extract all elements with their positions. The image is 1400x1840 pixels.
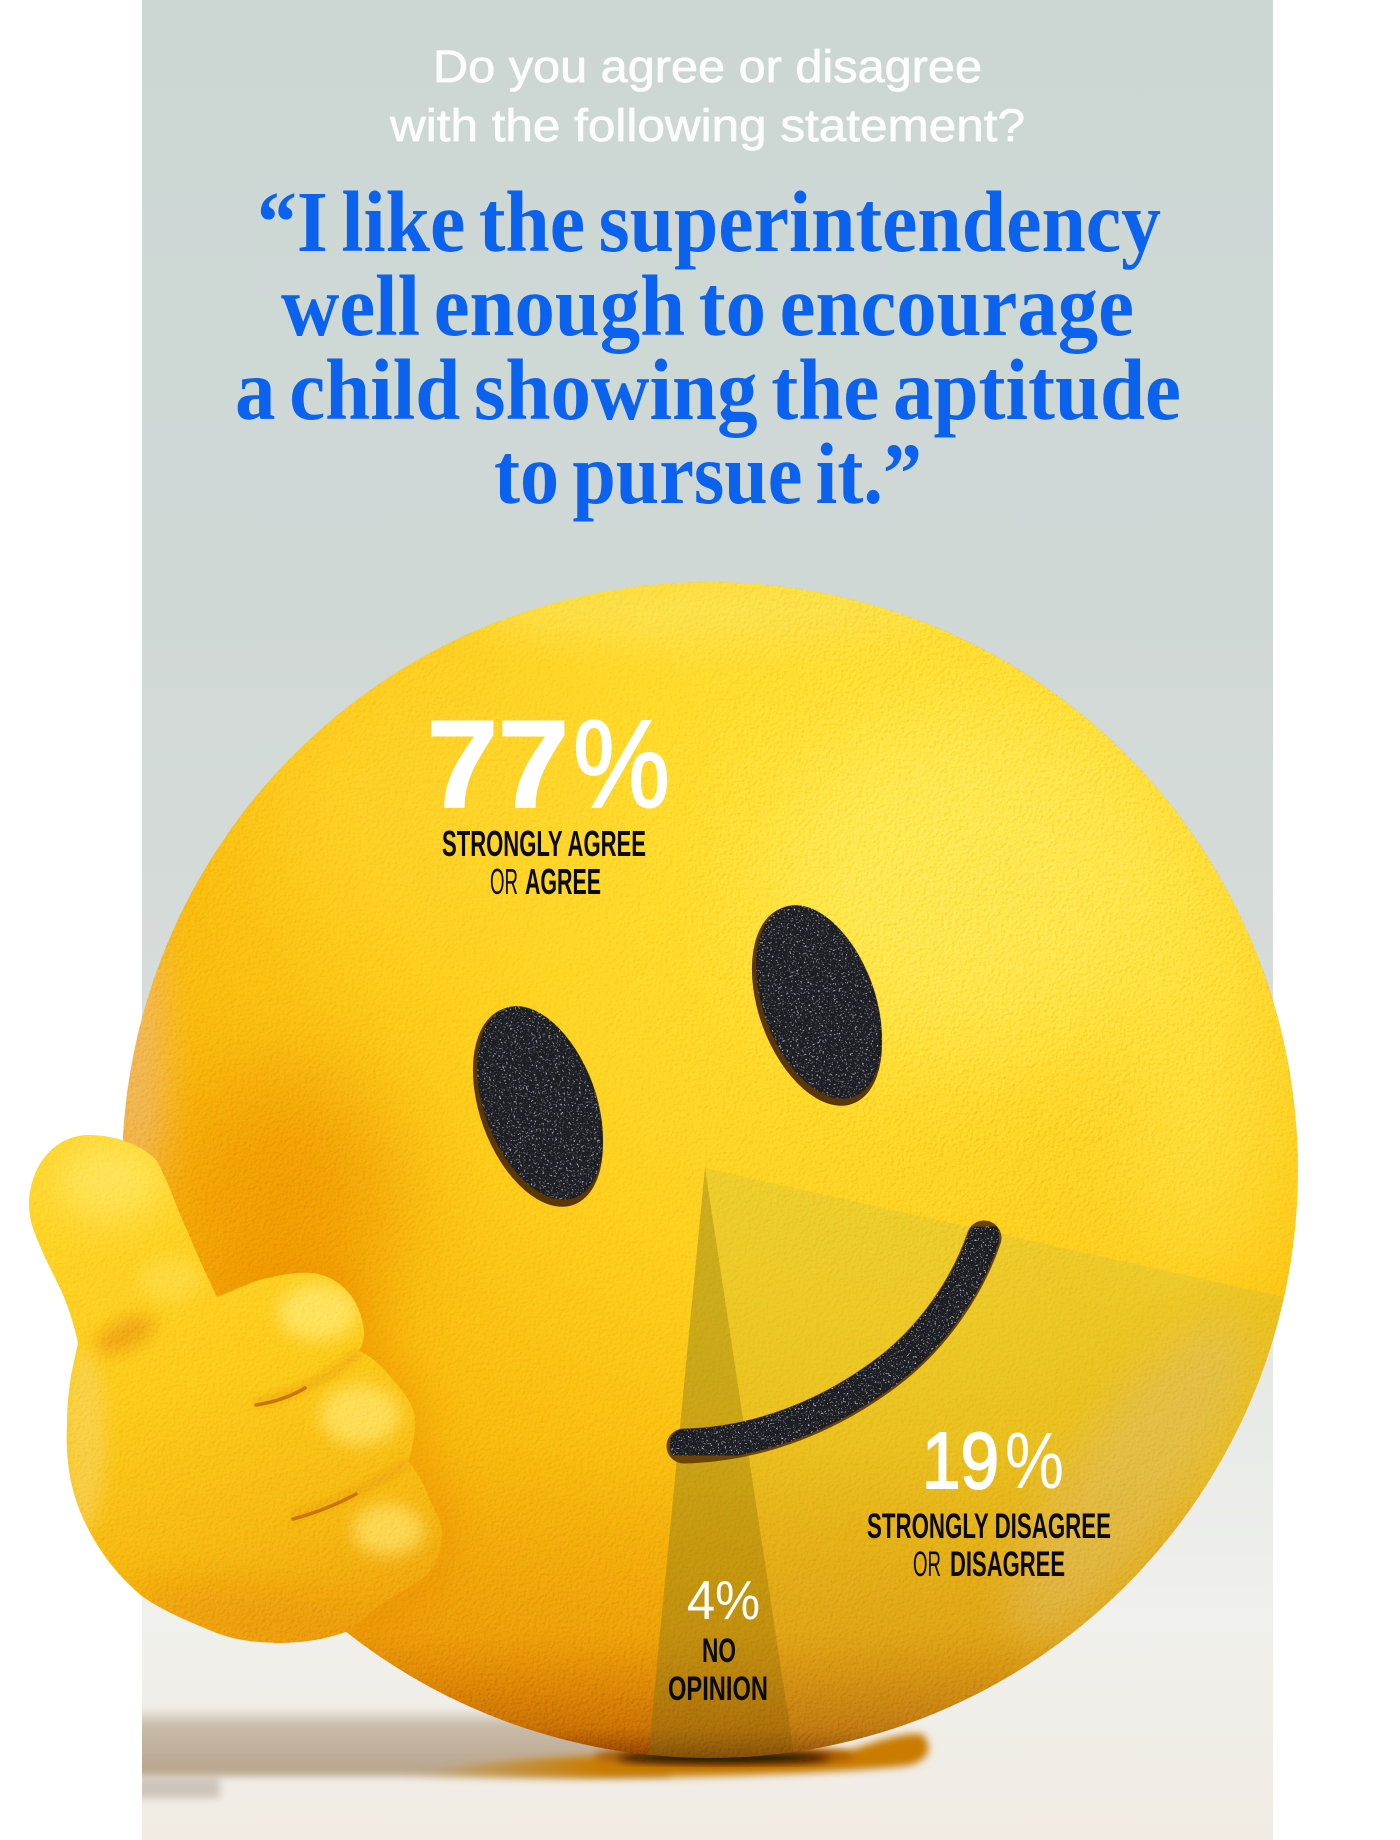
title: quoted statement: “I like the superintendency bbox=[257, 173, 1161, 270]
pie slice: 19% strongly disagree or disagree bbox=[705, 1168, 1284, 1752]
title: quoted statement: well enough to encourage bbox=[281, 257, 1134, 354]
stat: 77% agree: STRONGLY AGREE bbox=[442, 823, 646, 864]
icon: right eye bbox=[727, 888, 907, 1124]
icon: left eye bbox=[448, 989, 628, 1225]
stat: 19% disagree bbox=[867, 1416, 1111, 1584]
stat: 19% disagree: DISAGREE bbox=[950, 1545, 1065, 1584]
intro question: with the following statement? bbox=[389, 100, 1025, 151]
stat: 4% no opinion: OPINION bbox=[668, 1670, 768, 1708]
intro question bbox=[389, 41, 1025, 151]
stat: 77% agree: OR bbox=[490, 861, 518, 902]
pie slice: 4% no opinion bbox=[648, 1168, 794, 1758]
stat: 19% disagree: OR bbox=[913, 1545, 941, 1584]
stat: 19% disagree: STRONGLY DISAGREE bbox=[867, 1507, 1111, 1546]
emoji ball bbox=[107, 574, 1300, 1760]
stat: 4% no opinion bbox=[668, 1569, 768, 1708]
intro question: Do you agree or disagree bbox=[433, 41, 982, 92]
stat: 19% disagree: 19 bbox=[922, 1416, 999, 1505]
stat: 19% disagree: % bbox=[1005, 1416, 1064, 1505]
stat: 77% agree: AGREE bbox=[525, 861, 601, 902]
floor shadow bbox=[100, 1708, 929, 1798]
icon: smile bbox=[684, 1237, 984, 1446]
stat: 77% agree bbox=[427, 696, 670, 902]
icon: thumbs-up hand bbox=[20, 1130, 450, 1664]
title: quoted statement: to pursue it.” bbox=[494, 425, 922, 522]
stat: 77% agree: 77 bbox=[427, 696, 569, 834]
title: quoted statement: a child showing the aptitude bbox=[235, 341, 1181, 438]
title: quoted statement bbox=[235, 173, 1181, 522]
stat: 77% agree: % bbox=[573, 696, 670, 834]
stat: 4% no opinion: NO bbox=[702, 1632, 736, 1670]
stat: 4% no opinion: 4% bbox=[687, 1569, 760, 1631]
